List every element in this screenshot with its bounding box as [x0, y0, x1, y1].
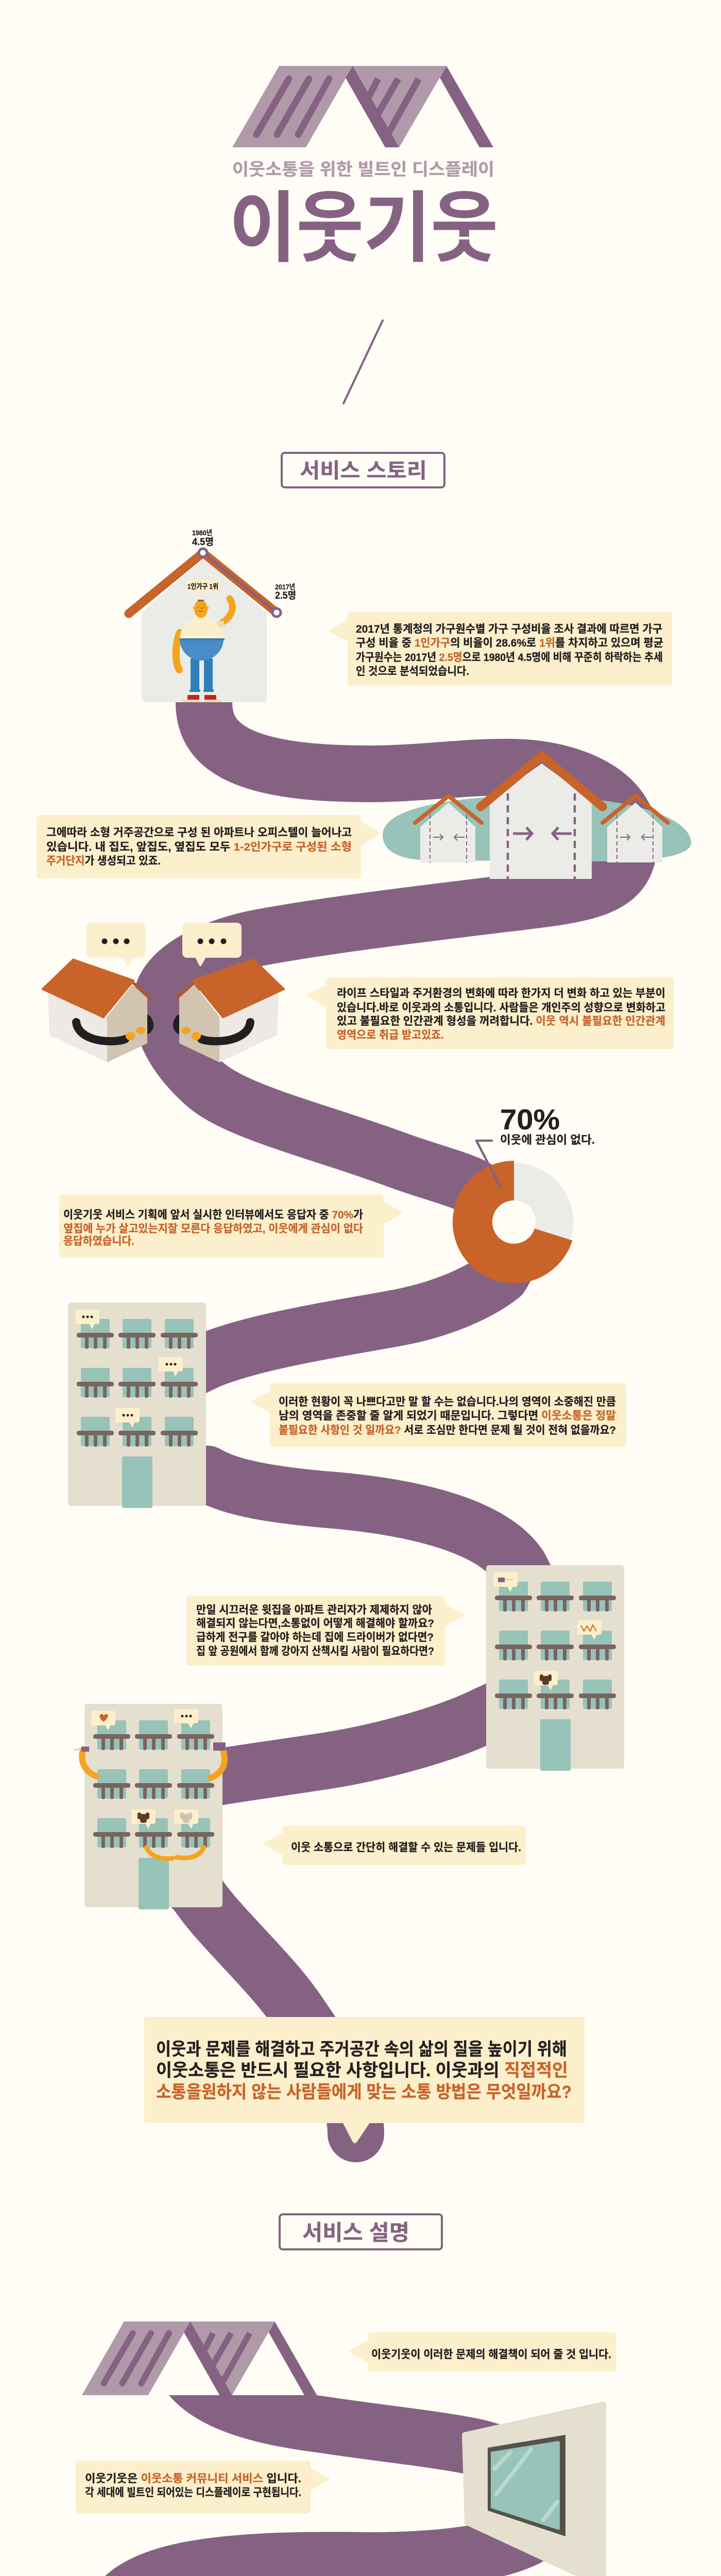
callout: small housing: 있습니다. 내 집도, 앞집도, 옆집도 모두 1-2인가구로 구성된 소형 — [46, 841, 352, 853]
callout: respect — [252, 1383, 626, 1447]
callout: statistics: 구성 비율 중 1인가구의 비율이 28.6%로 1위를 차지하고 있으며 평균 — [356, 637, 663, 649]
callout: interview: 옆집에 누가 살고있는지잘 모른다 응답하였고, 이웃에게 관심이 없다 — [63, 1223, 363, 1235]
callout: community service: 이웃기웃은 이웃소통 커뮤니티 서비스 입니다. — [85, 2472, 301, 2485]
callout: lifestyle: 라이프 스타일과 주거환경의 변화에 따라 한가지 더 변화 하고 있는 부분이 — [337, 987, 665, 999]
big callout: key question: 이웃과 문제를 해결하고 주거공간 속의 삶의 질을 높이기 위해 — [156, 2040, 567, 2059]
house with single-person figure: 2017년 — [275, 583, 295, 591]
callout: respect: 불필요한 사항인 것 일까요? 서로 조심만 한다면 문제 될 것이 전혀 없을까요? — [279, 1424, 616, 1436]
callout: questions — [186, 1596, 463, 1666]
heading: service description: 서비스 설명 — [302, 2221, 409, 2245]
big callout: key question — [144, 2017, 585, 2143]
callout: solution — [350, 2332, 616, 2371]
callout: interview: 응답하였습니다. — [63, 1235, 134, 1247]
heading: service story: 서비스 스토리 — [300, 460, 427, 482]
callout: questions: 급하게 전구를 갈아야 하는데 집에 드라이버가 없다면? — [196, 1631, 434, 1643]
callout: lifestyle: 있습니다.바로 이웃과의 소통입니다. 사람들은 개인주의 성향으로 변화하고 — [337, 1002, 665, 1014]
callout: small housing: 그에따라 소형 거주공간으로 구성 된 아파트나 오피스텔이 늘어나고 — [46, 826, 352, 839]
house: big center — [480, 756, 603, 879]
callout: questions: 해결되지 않는다면,소통없이 어떻게 해결해야 할까요? — [196, 1617, 434, 1630]
logo — [232, 66, 493, 147]
speech bubbles: silent houses — [87, 923, 242, 967]
donut chart: 70%: 70% — [500, 1103, 560, 1136]
callout: statistics: 가구원수는 2017년 2.5명으로 1980년 4.5명에 비해 꾸준히 하락하는 추세 — [356, 651, 663, 664]
callout: interview — [59, 1194, 402, 1258]
title: 이웃기웃 — [229, 185, 498, 272]
subtitle: 이웃소통을 위한 빌트인 디스플레이 — [232, 160, 494, 179]
callout: community service — [76, 2461, 329, 2514]
ribbon: service road — [105, 2395, 544, 2576]
callout: questions: 집 앞 공원에서 함께 강아지 산책시킬 사람이 필요하다면? — [196, 1645, 434, 1657]
heading: service description — [280, 2214, 442, 2249]
callout: simple problems: 이웃 소통으로 간단히 해결할 수 있는 문제들 입니다. — [291, 1841, 521, 1854]
callout: solution: 이웃기웃이 이러한 문제의 해결책이 되어 줄 것 입니다. — [371, 2348, 611, 2361]
callout: statistics: 2017년 통계청의 가구원수별 가구 구성비율 조사 결과에 따르면 가구 — [356, 623, 662, 635]
callout: interview: 이웃기웃 서비스 기획에 앞서 실시한 인터뷰에서도 응답자 중 70%가 — [63, 1209, 363, 1221]
logo small — [82, 2321, 317, 2395]
callout: questions: 만일 시끄러운 윗집을 아파트 관리자가 제제하지 않아 — [196, 1604, 432, 1616]
callout: lifestyle: 영역으로 취급 받고있죠. — [337, 1029, 444, 1041]
callout: respect: 남의 영역을 존중할 줄 알게 되었기 때문입니다. 그렇다면 이웃소통은 정말 — [279, 1410, 616, 1422]
callout: statistics: 인 것으로 분석되었습니다. — [356, 665, 469, 677]
callout: small housing — [37, 815, 380, 878]
apartment building 3 with helping arms — [74, 1704, 226, 1909]
callout: respect: 이러한 현황이 꼭 나쁘다고만 말 할 수는 없습니다.나의 영역이 소중해진 만큼 — [279, 1396, 616, 1408]
apartment building 1 — [68, 1302, 206, 1508]
divider slash — [344, 320, 383, 403]
ribbon end cap — [328, 2106, 384, 2162]
house: small left — [415, 796, 482, 862]
callout: lifestyle: 있고 불필요한 인간관계 형성을 꺼려합니다. 이웃 역시 불필요한 인간관계 — [337, 1015, 665, 1027]
callout: community service: 각 세대에 빌트인 되어있는 디스플레이로 구현됩니다. — [85, 2486, 301, 2499]
callout: simple problems — [264, 1826, 525, 1865]
wall display — [462, 2402, 606, 2576]
callout: statistics — [330, 612, 672, 686]
house: left with covered ears — [42, 959, 150, 1062]
donut chart: 70%: 이웃에 관심이 없다. — [500, 1133, 595, 1146]
house with single-person figure — [129, 529, 296, 702]
ribbon: story road — [115, 702, 629, 2134]
callout: small housing: 주거단지가 생성되고 있죠. — [46, 855, 161, 867]
teal ground behind houses — [383, 796, 691, 861]
house with single-person figure: 2.5명 — [275, 590, 296, 601]
house with single-person figure: 1980년 — [192, 529, 212, 537]
donut chart: 70% — [453, 1103, 595, 1283]
house: small right — [603, 796, 668, 862]
house with single-person figure: 4.5명 — [192, 536, 214, 548]
house: right with covered ears — [176, 959, 284, 1062]
big callout: key question: 이웃소통은 반드시 필요한 사항입니다. 이웃과의 직접적인 — [156, 2061, 568, 2080]
apartment building 2 — [486, 1565, 624, 1771]
big callout: key question: 소통을원하지 않는 사람들에게 맞는 소통 방법은 무엇일까요? — [156, 2082, 572, 2102]
house with single-person figure: 1인가구 1위 — [187, 583, 218, 590]
callout: lifestyle — [307, 977, 674, 1049]
heading: service story — [282, 453, 444, 487]
